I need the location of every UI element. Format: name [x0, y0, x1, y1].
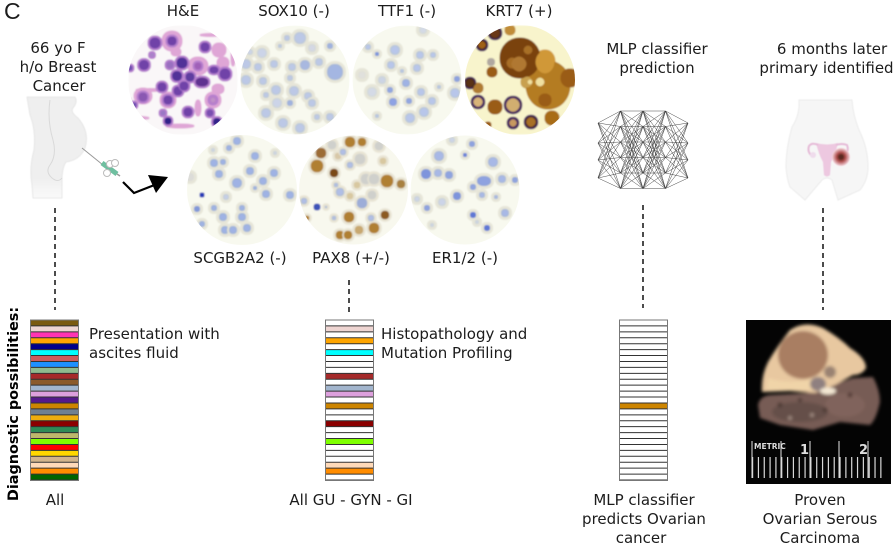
dashed connector: classifier: [642, 205, 644, 308]
stacked bar: after histopathology: [326, 320, 374, 481]
arrow: to micrographs: [123, 175, 168, 193]
dashed connector: outcome: [822, 208, 824, 310]
icon: pelvis with ovarian tumour: [786, 100, 868, 200]
dashed connector: histopathology: [348, 280, 350, 312]
caption: classifier result: MLP classifier: [593, 491, 695, 509]
stain label PAX8: PAX8 (+/-): [312, 249, 390, 267]
micrograph: SOX10: [240, 25, 350, 135]
caption: all GU GYN GI: All GU - GYN - GI: [289, 491, 413, 509]
stain label H&E: H&E: [167, 2, 199, 20]
micrograph: SCGB2A2: [185, 134, 298, 246]
stacked bar: classifier prediction: [620, 320, 668, 481]
stain label KRT7: KRT7 (+): [486, 2, 552, 20]
photo: gross tumour specimen: [746, 320, 891, 484]
micrograph: KRT7: [464, 25, 579, 135]
photo: gross tumour specimen: METRIC: [754, 442, 786, 451]
classifier heading: MLP classifier: [606, 40, 708, 58]
caption: proven diagnosis: Proven: [794, 491, 846, 509]
caption: classifier result: predicts Ovarian: [582, 510, 706, 528]
caption: proven diagnosis: Ovarian Serous: [763, 510, 878, 528]
bar note: histopathology: Histopathology and: [381, 325, 527, 343]
patient heading: Cancer: [33, 77, 86, 95]
bar note: all: ascites fluid: [89, 344, 179, 362]
micrograph: H&E: [128, 29, 236, 130]
micrograph: TTF1: [352, 25, 462, 135]
micrograph: PAX8: [298, 134, 410, 246]
photo: gross tumour specimen: 1: [800, 443, 809, 458]
classifier heading: prediction: [619, 59, 695, 77]
patient heading: h/o Breast: [20, 58, 96, 76]
icon: neural network: [598, 111, 688, 188]
stain label SOX10: SOX10 (-): [258, 2, 330, 20]
outcome heading: 6 months later: [777, 40, 887, 58]
dashed connector: patient: [54, 208, 56, 310]
icon: patient body with syringe: [27, 97, 120, 198]
photo: gross tumour specimen: 2: [859, 443, 868, 458]
micrograph: ER1/2: [410, 134, 522, 246]
stain label ER1/2: ER1/2 (-): [432, 249, 498, 267]
stacked bar: all diagnoses: [30, 320, 78, 481]
bar note: all: Presentation with: [89, 325, 220, 343]
patient heading: 66 yo F: [30, 39, 86, 57]
caption: classifier result: cancer: [616, 529, 667, 547]
stain label SCGB2A2: SCGB2A2 (-): [193, 249, 287, 267]
caption: all: All: [46, 491, 64, 509]
stain label TTF1: TTF1 (-): [377, 2, 436, 20]
caption: proven diagnosis: Carcinoma: [780, 529, 860, 547]
bar note: histopathology: Mutation Profiling: [381, 344, 513, 362]
outcome heading: primary identified: [759, 59, 894, 77]
y axis label: Diagnostic possibilities:: [6, 307, 22, 501]
